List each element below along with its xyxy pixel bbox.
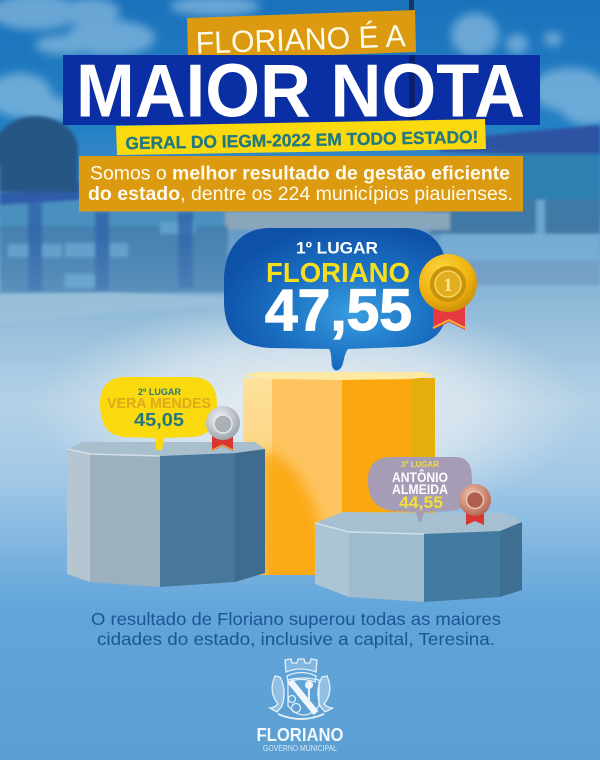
callout: third place [368, 457, 491, 525]
callout: third place: ALMEIDA [392, 481, 448, 497]
pole [409, 0, 414, 12]
icon: crest [270, 659, 333, 719]
callout: first place: 47,55 [265, 278, 412, 343]
callout: second place: VERA MENDES [107, 395, 211, 412]
callout: first place [224, 228, 477, 370]
podium: second place [67, 442, 265, 587]
tree [0, 116, 78, 192]
callout: third place: 44,55 [399, 493, 443, 512]
banner: subtitle: do estado, dentre os 224 municípios piauienses. [88, 184, 513, 205]
logo: Floriano coat of arms: FLORIANO [256, 724, 344, 745]
text block: closing statement: O resultado de Floriano superou todas as maiores [91, 609, 501, 629]
building [0, 125, 600, 293]
logo: Floriano coat of arms [256, 659, 344, 753]
banner: geral do IEGM: GERAL DO IEGM-2022 EM TODO ESTADO! [125, 127, 479, 153]
callout: first place: FLORIANO [266, 257, 410, 288]
icon: gold medal [419, 254, 477, 330]
banner: subtitle [79, 156, 523, 212]
banner: maior nota: MAIOR NOTA [76, 48, 525, 132]
callout: first place: 1º LUGAR [296, 238, 378, 258]
podium: third place [315, 512, 522, 602]
icon: bronze medal [459, 484, 491, 525]
callout: second place: 45,05 [134, 410, 184, 430]
podium: first place [243, 372, 435, 585]
clouds [0, 0, 600, 125]
callout: second place [100, 377, 240, 451]
icon: gold medal: 1 [443, 275, 453, 296]
callout: second place: 2º LUGAR [138, 387, 181, 398]
callout: third place: 3º LUGAR [401, 459, 439, 469]
banner: Floriano é a: FLORIANO É A [195, 18, 406, 61]
icon: silver medal [206, 406, 240, 451]
text block: closing statement [91, 609, 501, 649]
text block: closing statement: cidades do estado, inclusive a capital, Teresina. [97, 629, 495, 649]
callout: third place: ANTÔNIO [392, 468, 448, 485]
logo: Floriano coat of arms: GOVERNO MUNICIPAL [263, 744, 337, 753]
glow [30, 298, 590, 522]
banner: subtitle: Somos o melhor resultado de gestão eficiente [90, 164, 510, 184]
